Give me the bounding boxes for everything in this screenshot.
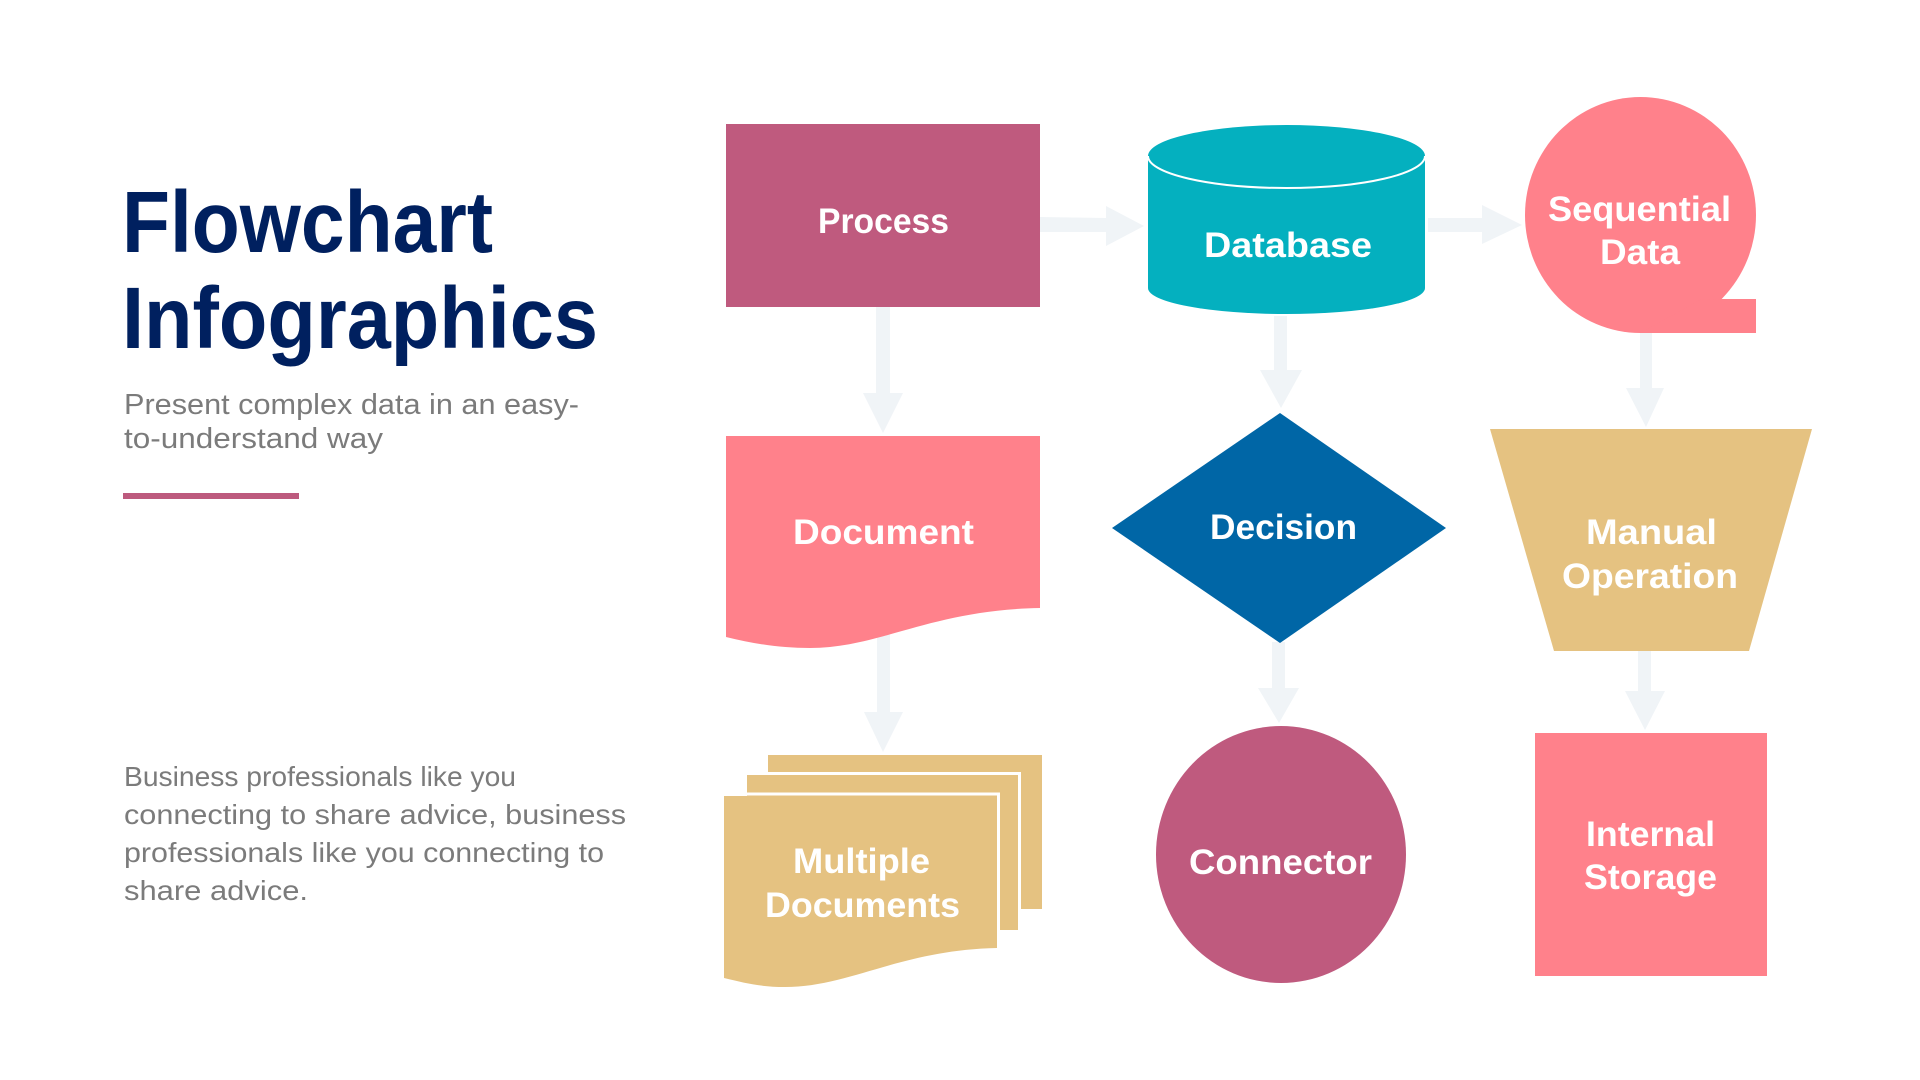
body text: connecting to share advice, business — [124, 799, 626, 830]
connector circle: Connector — [1189, 843, 1372, 882]
arrow: process to document — [863, 307, 903, 433]
arrow: database to decision — [1260, 316, 1302, 408]
body text: professionals like you connecting to — [124, 837, 604, 868]
subtitle: Present complex data in an easy- — [124, 389, 579, 421]
subtitle — [124, 389, 579, 455]
sequential data circle — [1525, 97, 1756, 333]
multiple documents stack: Documents — [765, 886, 960, 925]
document shape — [726, 436, 1040, 648]
manual operation trapezoid: Operation — [1562, 557, 1738, 596]
body text — [124, 761, 626, 906]
decision diamond: Decision — [1210, 508, 1357, 547]
internal storage box — [1535, 733, 1767, 976]
sequential data circle: Sequential — [1548, 190, 1731, 229]
decision diamond — [1112, 413, 1446, 643]
multiple documents stack — [724, 755, 1042, 987]
internal storage box: Internal — [1586, 815, 1715, 854]
process box: Process — [818, 202, 949, 241]
subtitle: to-understand way — [124, 423, 384, 455]
arrow: document to multiple documents — [864, 630, 903, 752]
manual operation trapezoid — [1490, 429, 1812, 651]
title — [122, 174, 598, 367]
connector circle — [1156, 726, 1406, 983]
database cylinder — [1148, 125, 1425, 314]
title: Flowchart — [122, 174, 493, 271]
document shape: Document — [793, 513, 974, 552]
arrow: database to sequential data — [1428, 205, 1522, 244]
accent rule — [123, 493, 299, 499]
process box — [726, 124, 1040, 307]
arrow: manual operation to internal storage — [1625, 651, 1665, 730]
sequential data circle: Data — [1600, 233, 1681, 272]
database cylinder: Database — [1204, 226, 1372, 265]
internal storage box: Storage — [1584, 858, 1717, 897]
arrow: decision to connector — [1258, 642, 1299, 723]
arrow: process to database — [1040, 206, 1144, 246]
body text: Business professionals like you — [124, 761, 516, 792]
manual operation trapezoid: Manual — [1586, 513, 1717, 552]
title: Infographics — [122, 270, 598, 367]
arrow: sequential data to manual operation — [1626, 333, 1664, 427]
multiple documents stack: Multiple — [793, 842, 930, 881]
body text: share advice. — [124, 875, 308, 906]
